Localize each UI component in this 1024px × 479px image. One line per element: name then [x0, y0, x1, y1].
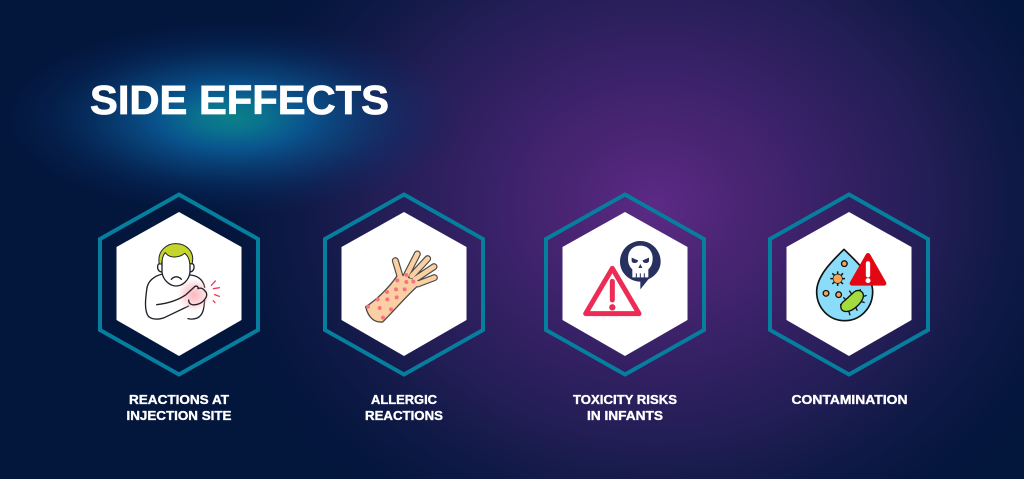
icon: arm with rash	[366, 254, 434, 322]
label: TOXICITY RISKS	[573, 393, 677, 407]
white hexagon	[342, 212, 466, 356]
hexagon frame	[546, 194, 704, 374]
hexagon frame	[100, 194, 258, 374]
white hexagon	[116, 212, 242, 356]
warning triangle	[586, 268, 639, 314]
label: REACTIONS AT	[129, 393, 229, 407]
label: IN INFANTS	[587, 409, 663, 423]
icon: man holding sore arm	[145, 244, 219, 319]
label: CONTAMINATION	[792, 393, 908, 407]
skull bubble	[620, 241, 661, 289]
panel: reactions at injection site	[100, 194, 258, 423]
hexagon frame	[325, 194, 483, 374]
white hexagon	[562, 212, 688, 356]
white hexagon	[786, 212, 912, 356]
title: SIDE EFFECTS	[90, 77, 389, 123]
icon: warning and skull	[586, 241, 661, 314]
label: REACTIONS	[365, 409, 443, 423]
panel: toxicity risks in infants	[546, 194, 704, 423]
label: INJECTION SITE	[126, 409, 232, 423]
panel: contamination	[770, 194, 928, 407]
icon: contaminated drop	[817, 249, 884, 321]
hexagon frame	[770, 194, 928, 374]
label: ALLERGIC	[371, 393, 437, 407]
panel: allergic reactions	[325, 194, 483, 423]
